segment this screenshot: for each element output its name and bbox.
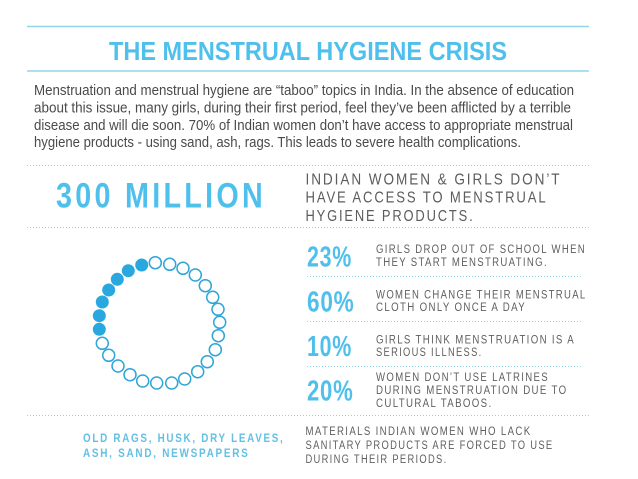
title: THE MENSTRUAL HYGIENE CRISIS	[109, 36, 507, 66]
intro paragraph: disease and will die soon. 70% of Indian women don’t have access to appropriate menstrual	[34, 117, 573, 134]
stat: 60%: CLOTH ONLY ONCE A DAY	[376, 302, 526, 314]
stat: 23%	[307, 242, 586, 274]
stat: 60%	[307, 286, 586, 318]
stat: 20%: DURING MENSTRUATION DUE TO	[376, 385, 568, 397]
materials caption: MATERIALS INDIAN WOMEN WHO LACK	[306, 426, 532, 438]
materials list	[83, 433, 284, 460]
materials caption	[306, 426, 554, 466]
materials caption: DURING THEIR PERIODS.	[306, 454, 448, 466]
heading: access statement	[306, 172, 562, 225]
intro paragraph: about this issue, many girls, during their first period, feel they’ve been afflicted by a terrible	[34, 100, 571, 116]
stat: 60%: WOMEN CHANGE THEIR MENSTRUAL	[376, 289, 586, 301]
intro paragraph	[34, 82, 574, 151]
materials list: OLD RAGS, HUSK, DRY LEAVES,	[83, 433, 284, 445]
intro paragraph: hygiene products - using sand, ash, rags. This leads to severe health complications.	[34, 134, 521, 151]
stat: 20%: 20%	[307, 376, 354, 408]
stat: 23%: GIRLS DROP OUT OF SCHOOL WHEN	[376, 244, 586, 256]
stat: 60%: 60%	[307, 286, 354, 318]
stat: 10%: GIRLS THINK MENSTRUATION IS A	[376, 334, 575, 346]
intro paragraph: Menstruation and menstrual hygiene are “taboo” topics in India. In the absence of education	[34, 82, 574, 99]
stat: 10%: SERIOUS ILLNESS.	[376, 347, 482, 359]
stat: 10%	[307, 331, 575, 363]
stat: 20%	[307, 372, 568, 410]
stat: 23%: THEY START MENSTRUATING.	[376, 257, 548, 269]
materials list: ASH, SAND, NEWSPAPERS	[83, 448, 250, 460]
heading: access statement: INDIAN WOMEN & GIRLS DON’T	[306, 172, 562, 188]
materials caption: SANITARY PRODUCTS ARE FORCED TO USE	[306, 440, 554, 452]
stat: 20%: CULTURAL TABOOS.	[376, 398, 492, 410]
heading: access statement: HYGIENE PRODUCTS.	[306, 208, 474, 225]
heading: access statement: HAVE ACCESS TO MENSTRUAL	[306, 190, 548, 206]
stat: 23%: 23%	[307, 242, 352, 274]
big number: 300 million: 300 MILLION	[56, 176, 266, 216]
donut of dots: 7 of 27 filled	[93, 257, 226, 389]
stat: 10%: 10%	[307, 331, 352, 363]
stat: 20%: WOMEN DON’T USE LATRINES	[376, 372, 549, 384]
